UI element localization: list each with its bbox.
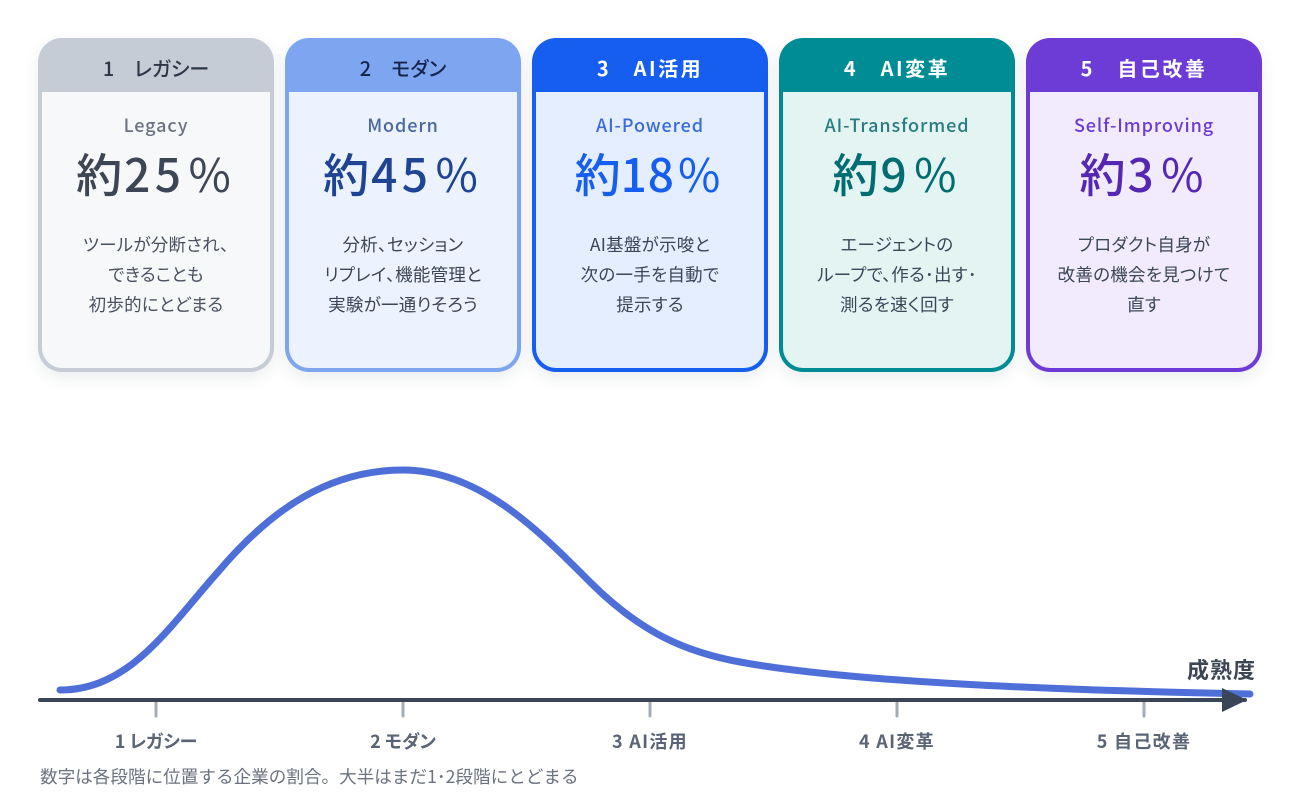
arrow head xyxy=(1222,688,1247,712)
card 5 description xyxy=(1058,232,1230,317)
card 1 body xyxy=(42,92,270,368)
tick label 5: 5 自己改善 xyxy=(1097,728,1191,754)
card 1 description xyxy=(83,232,229,317)
card 3 description: 提示する xyxy=(616,292,684,317)
card 2 description xyxy=(324,232,482,317)
card 1 header: 1 レガシー xyxy=(103,53,209,82)
card 2 body xyxy=(289,92,517,368)
card 5 percentage: 約3% xyxy=(1079,140,1204,206)
card 3 description: AI基盤が示唆と xyxy=(590,232,710,257)
card 4 body xyxy=(783,92,1011,368)
card 5 header: 5 自己改善 xyxy=(1081,53,1207,82)
axis line with ticks xyxy=(40,700,1245,716)
card 1 description: できることも xyxy=(108,262,204,287)
tick label 3: 3 AI活用 xyxy=(612,728,688,754)
card 1 description: ツールが分断され、 xyxy=(83,232,229,257)
card 5 english name: Self-Improving xyxy=(1074,112,1214,138)
card 4 header: 4 AI変革 xyxy=(844,53,950,82)
card 5 body xyxy=(1030,92,1258,368)
card 5 description: プロダクト自身が xyxy=(1078,232,1210,257)
card 5 description: 改善の機会を見つけて xyxy=(1058,262,1230,287)
card 4 description: ループで、作る･出す･ xyxy=(817,262,977,287)
card 5 description: 直す xyxy=(1127,292,1161,317)
distribution curve xyxy=(60,470,1250,694)
card 4 english name: AI-Transformed xyxy=(825,112,969,138)
card 4 description: 測るを速く回す xyxy=(840,292,954,317)
tick label 2: 2 モダン xyxy=(370,728,436,754)
card 3 description: 次の一手を自動で xyxy=(581,262,719,287)
card 3 percentage: 約18% xyxy=(575,140,720,206)
axis title: 成熟度 xyxy=(1187,653,1256,685)
card 3 description xyxy=(581,232,719,317)
card 4 description xyxy=(817,232,977,317)
card 2 english name: Modern xyxy=(367,112,439,138)
card 1 percentage: 約25% xyxy=(76,140,231,206)
card 2 percentage: 約45% xyxy=(323,140,478,206)
card 1 description: 初歩的にとどまる xyxy=(89,292,223,317)
card 2 header: 2 モダン xyxy=(360,53,446,82)
card 2 description: リプレイ、機能管理と xyxy=(324,262,482,287)
footnote: 数字は各段階に位置する企業の割合。大半はまだ1･2段階にとどまる xyxy=(40,764,579,789)
card 1 english name: Legacy xyxy=(124,112,188,138)
card 3 english name: AI-Powered xyxy=(596,112,704,138)
tick label 1: 1 レガシー xyxy=(115,728,197,754)
card 2 description: 分析、セッション xyxy=(343,232,463,257)
card 2 description: 実験が一通りそろう xyxy=(328,292,478,317)
card 4 percentage: 約9% xyxy=(832,140,957,206)
panel: card 5 Self-Improving xyxy=(1026,38,1262,372)
panel: card 3 AI-Powered xyxy=(532,38,768,372)
panel: card 4 AI-Transformed xyxy=(779,38,1015,372)
panel: card 1 Legacy xyxy=(38,38,274,372)
card 3 header: 3 AI活用 xyxy=(597,53,703,82)
card 4 description: エージェントの xyxy=(841,232,953,257)
tick label 4: 4 AI変革 xyxy=(859,728,935,754)
panel: card 2 Modern xyxy=(285,38,521,372)
card 3 body xyxy=(536,92,764,368)
